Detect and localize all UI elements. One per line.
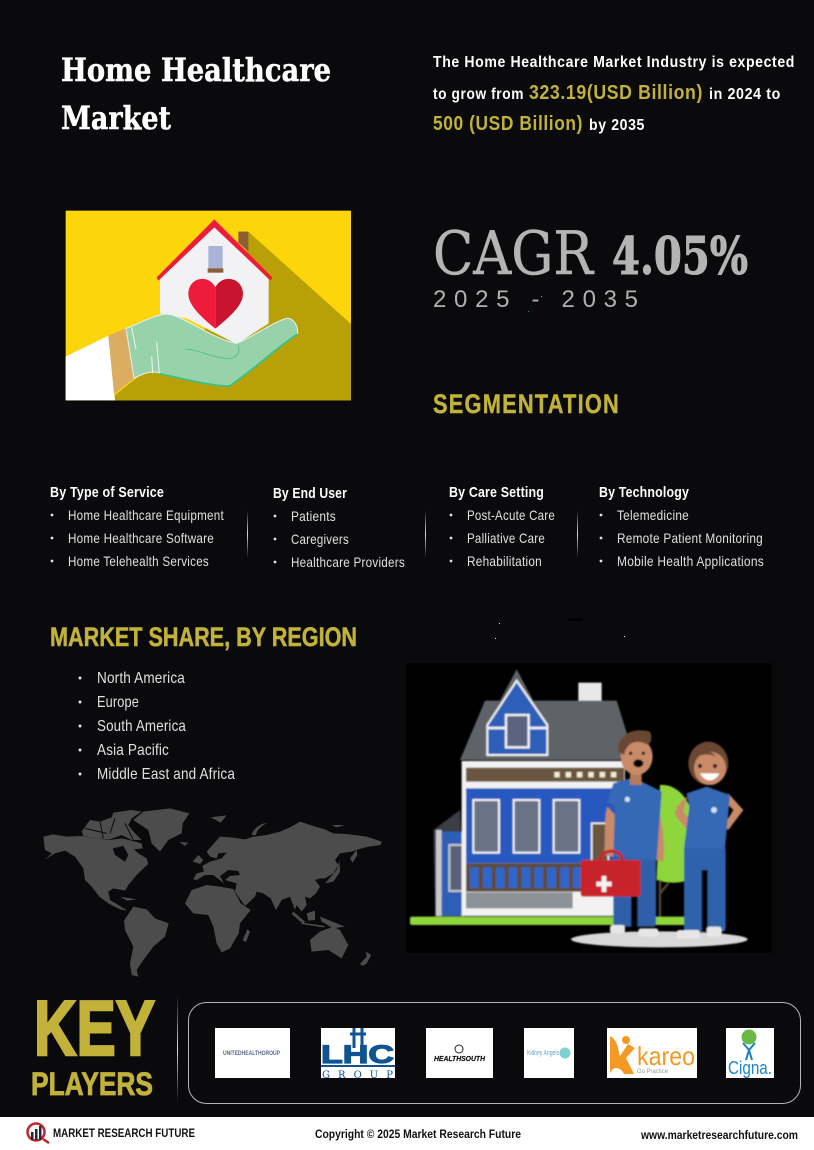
market summary text: 500 (USD Billion) [433,113,583,135]
CAGR figure: CAGR [433,219,595,289]
market summary text: by 2035 [589,117,645,134]
title: Home Healthcare [61,51,331,89]
CAGR figure: 4.05% [612,227,748,287]
panel: segmentation columns [50,484,764,570]
column: by care setting: Palliative Care [467,530,545,546]
logo: UnitedHealth Group [215,1028,290,1078]
illustration: hand holding house with heart [66,211,351,400]
panel: key player logos [188,1002,800,1104]
title [61,51,331,137]
column: by type of service [50,484,224,569]
region list: Middle East and Africa [97,766,235,783]
column: by technology: By Technology [599,484,689,501]
column: by end user: By End User [273,485,347,502]
heading: key players: KEY [34,984,155,1072]
region list: Asia Pacific [97,742,169,759]
column: by end user [273,485,405,570]
logo: UnitedHealth Group: UNITEDHEALTHGROUP [223,1051,280,1057]
logo: LHC Group [321,1028,395,1081]
logo: LHC Group: LHC [321,1041,394,1069]
column: by technology: Mobile Health Applications [617,553,764,569]
heading: market share by region: MARKET SHARE, BY REGION [50,622,357,652]
column: by end user: Caregivers [291,531,349,547]
market summary text: to grow from [433,86,524,103]
illustration: nurses in front of a house [406,663,772,953]
market summary text: 323.19(USD Billion) [529,82,703,104]
column: by end user: Patients [291,508,336,524]
logo: Kidney Angels: Kidney Angels [527,1050,559,1057]
heading: key players: PLAYERS [31,1066,153,1102]
heading: segmentation: SEGMENTATION [433,389,620,419]
column: by care setting: Post-Acute Care [467,507,555,523]
column: by end user: Healthcare Providers [291,554,405,570]
footer bar [0,1117,814,1150]
specks [495,618,625,639]
female nurse [675,742,743,939]
logo: Kidney Angels [524,1028,574,1078]
footer bar: Copyright © 2025 Market Research Future [315,1127,521,1141]
logo: Kareo: Go Practice [637,1068,668,1075]
market summary text [433,54,795,135]
column: by type of service: Home Telehealth Services [68,553,209,569]
title: Market [61,99,171,137]
logo: HealthSouth: HEALTHSOUTH [434,1054,486,1063]
heading: key players [31,984,155,1102]
first aid case [581,851,641,897]
logo: Cigna [726,1028,774,1078]
column: by care setting: By Care Setting [449,484,544,501]
region list: North America [97,670,185,687]
column: by technology [599,484,764,569]
icon: market research future logo [28,1124,49,1143]
logo: Kareo [607,1028,697,1078]
column: by technology: Remote Patient Monitoring [617,530,763,546]
column: by care setting: Rehabilitation [467,553,542,569]
logo: Kareo: kareo [637,1041,695,1071]
region list: South America [97,718,186,735]
region list [78,670,235,783]
column: by technology: Telemedicine [617,507,689,523]
logo: Cigna: Cigna. [728,1058,772,1078]
column: by type of service: Home Healthcare Software [68,530,214,546]
male nurse [604,730,664,937]
column: by type of service: By Type of Service [50,484,164,501]
region list: Europe [97,694,139,711]
column: by care setting [449,484,555,569]
footer bar: MARKET RESEARCH FUTURE [53,1126,195,1140]
logo: HealthSouth [426,1028,493,1078]
market summary text: in 2024 to [709,86,781,103]
CAGR figure [433,219,748,313]
world map [43,808,382,977]
column: by type of service: Home Healthcare Equipment [68,507,224,523]
logo: LHC Group: GROUP [322,1070,393,1081]
CAGR figure: 2025 - 2035 [433,286,638,313]
